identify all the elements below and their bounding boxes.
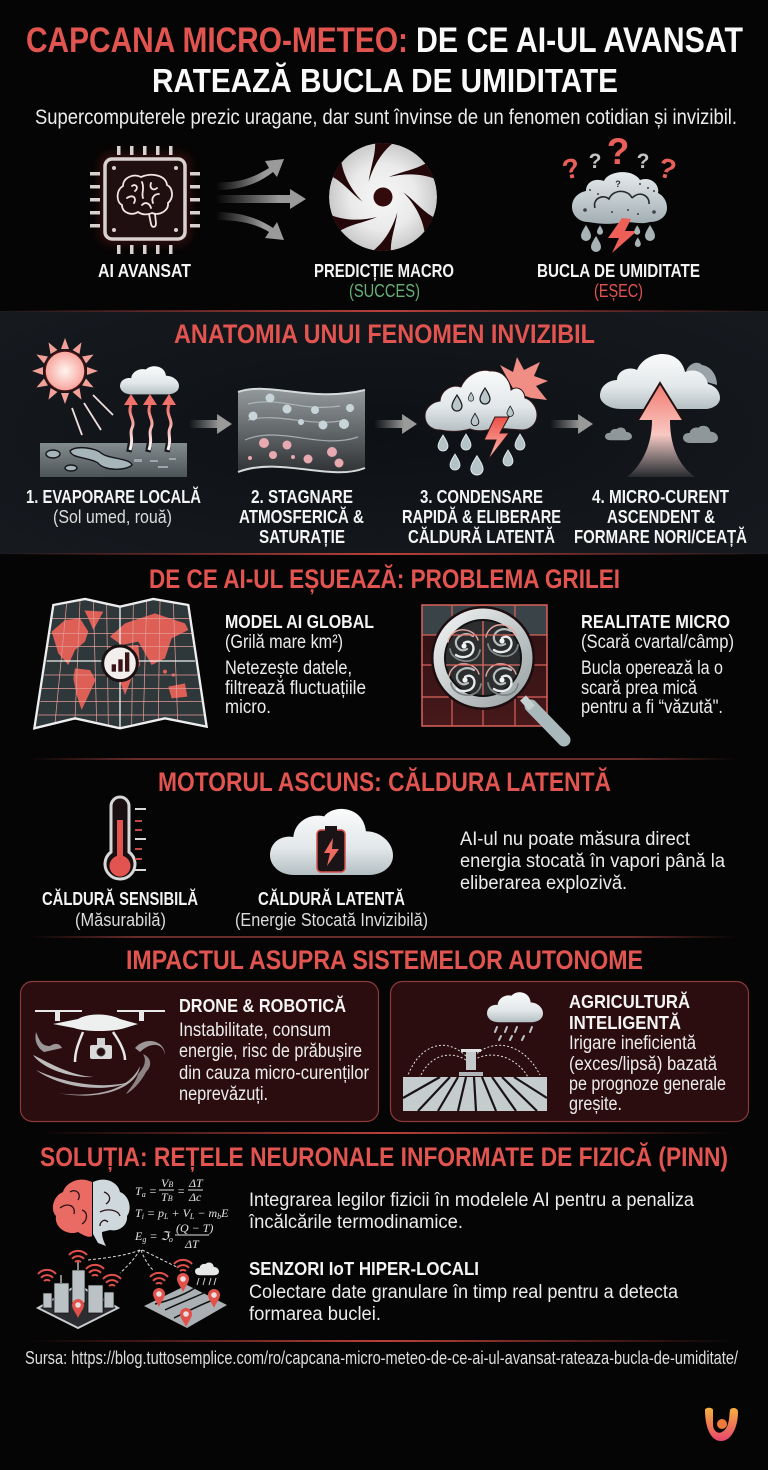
text: physics integration [248,1190,694,1233]
arrows: AI to macro [216,159,306,240]
icon: storm cloud with question marks: ? [607,131,629,172]
labels: top row: (SUCCES) [349,281,420,301]
labels: heat types [42,888,428,930]
labels: anatomy steps: RAPIDĂ & ELIBERARE [402,506,561,527]
text: micro reality: REALITATE MICRO [581,612,730,632]
text: agriculture [569,991,726,1115]
icon: stagnant saturated air [238,389,365,472]
labels: anatomy steps: ATMOSFERICĂ & [239,506,364,527]
labels: heat types: (Măsurabilă) [75,910,166,930]
icon: world map with grid [34,599,207,728]
text: physics integration: Integrarea legilor fizicii în modelele AI pentru a penaliza [249,1190,694,1211]
labels: anatomy steps: 3. CONDENSARE [420,487,543,507]
icon: storm cloud with question marks: ? [637,150,649,173]
icon: cloud with battery [270,809,393,875]
labels: top row [98,261,700,301]
icon: AI chip with brain [90,146,200,254]
text: latent heat explanation [460,829,725,894]
labels: anatomy steps: 4. MICRO-CURENT [592,487,729,507]
heading: grid problem: DE CE AI-UL EȘUEAZĂ: PROBLEMA GRILEI [149,563,620,594]
icon: half brain with equations: VB [161,1176,173,1190]
text: physics integration: încălcările termodinamice. [248,1212,463,1233]
text: micro reality [581,612,734,718]
heading: anatomy: ANATOMIA UNUI FENOMEN INVIZIBIL [174,319,595,349]
labels: anatomy steps: (Sol umed, rouă) [53,507,172,527]
text: micro reality: Bucla operează la o [581,658,723,679]
icon: half brain with equations: = ℑ [146,1229,171,1243]
icon: half brain with equations: a [142,1190,146,1199]
title: RATEAZĂ BUCLA DE UMIDITATE [152,62,618,99]
text: micro reality: pentru a fi “văzută". [581,697,723,718]
arrow: step 3 to 4 [550,414,593,434]
icon: half brain with equations: Δc [188,1190,202,1204]
text: latent heat explanation: eliberarea explozivă. [460,873,627,894]
labels: heat types: CĂLDURĂ LATENTĂ [258,888,405,909]
title [26,21,743,99]
title: CAPCANA MICRO-METEO: [26,21,408,60]
icon: half brain with equations: L [163,1212,169,1221]
icon: sun, evaporation and ground [32,338,187,477]
text: drones: energie, risc de prăbușire [179,1041,362,1062]
labels: anatomy steps: CĂLDURĂ LATENTĂ [408,526,555,547]
text: drones: DRONE & ROBOTICĂ [179,995,346,1016]
arrow: step 1 to 2 [189,414,232,434]
icon: half brain with equations: ΔT [188,1176,204,1190]
panel: agriculture [390,982,748,1122]
logo [705,1408,738,1441]
text: drones: neprevăzuți. [179,1084,268,1105]
arrow: step 2 to 3 [374,414,417,434]
text: agriculture: (exces/lipsă) bazată [569,1054,717,1075]
icon: half brain with equations: = [177,1184,185,1198]
text: global AI model: MODEL AI GLOBAL [225,612,374,632]
icon: half brain with equations: − m [194,1206,217,1220]
text: IoT sensors: Colectare date granulare în timp real pentru a detecta [249,1282,678,1303]
text: global AI model: filtrează fluctuațiile [225,678,366,699]
icon: half brain with equations: E [135,1229,142,1243]
labels: top row: PREDICȚIE MACRO [314,261,454,281]
icon: IoT sensors city and field [38,1250,227,1328]
labels: heat types: CĂLDURĂ SENSIBILĂ [42,888,198,909]
labels: anatomy steps: 1. EVAPORARE LOCALĂ [26,486,201,507]
icon: half brain with equations [53,1176,229,1251]
text: latent heat explanation: energia stocată în vapori până la [460,851,725,872]
icon: drone in turbulence [33,1011,165,1096]
icon: hurricane [329,143,437,251]
icon: storm cloud with question marks: ? [589,150,601,173]
text: agriculture: greșite. [569,1094,622,1115]
icon: condensation cloud with lightning [425,357,548,475]
icon: irrigation sprinkler under cloud [403,992,547,1111]
text: IoT sensors: formarea buclei. [249,1304,381,1325]
text: drones: din cauza micro-curenților [179,1063,370,1084]
heading: latent heat: MOTORUL ASCUNS: CĂLDURA LATENTĂ [158,766,611,797]
icon: half brain with equations: L [189,1212,195,1221]
text: micro reality: scară prea mică [581,678,697,699]
labels: anatomy steps: 2. STAGNARE [251,487,353,507]
icon: storm cloud with question marks: ? [559,152,583,186]
icon: half brain with equations: = p [144,1206,164,1220]
text: global AI model: micro. [225,697,271,718]
text: global AI model [225,612,374,718]
text: agriculture: AGRICULTURĂ [569,991,690,1012]
labels: anatomy steps: SATURAȚIE [259,527,345,547]
text: agriculture: INTELIGENTĂ [569,1012,681,1033]
labels: anatomy steps: ASCENDENT & [607,507,715,527]
labels: heat types: (Energie Stocată Invizibilă) [235,910,428,930]
text: latent heat explanation: AI-ul nu poate măsura direct [460,829,691,850]
icon: half brain with equations: i [142,1212,144,1221]
text: global AI model: Netezește datele, [225,658,352,679]
icon: half brain with equations: b [217,1212,221,1221]
text: drones [179,995,370,1105]
text: IoT sensors [249,1259,678,1325]
labels: top row: BUCLA DE UMIDITATE [537,261,700,281]
text: global AI model: (Grilă mare km²) [225,632,343,653]
text: IoT sensors: SENZORI IoT HIPER-LOCALI [249,1259,479,1279]
icon: magnifier over micro grid [422,605,564,740]
icon: half brain with equations: g [142,1235,146,1244]
labels: anatomy steps [26,486,747,547]
text: drones: Instabilitate, consum [179,1020,331,1041]
icon: half brain with equations: = [146,1184,157,1198]
icon: half brain with equations: T [135,1206,142,1220]
heading: impact: IMPACTUL ASUPRA SISTEMELOR AUTONOME [126,945,643,975]
icon: half brain with equations: TB [161,1190,173,1204]
icon: storm cloud with question marks: ? [655,152,679,186]
icon: half brain with equations: ΔT [184,1237,200,1251]
icon: half brain with equations: T [135,1184,142,1198]
icon: half brain with equations: E [220,1206,229,1220]
text: agriculture: Irigare ineficientă [569,1033,696,1054]
icon: micro-current and clouds [600,354,720,477]
text: micro reality: (Scară cvartal/câmp) [581,632,734,653]
icon: half brain with equations: (Q − T) [176,1221,213,1235]
icon: half brain with equations: o [169,1235,173,1244]
panel: drones [20,982,378,1122]
icon: half brain with equations: + V [168,1206,192,1220]
text: agriculture: pe prognoze generale [569,1074,726,1095]
icon: storm cloud with question marks [559,131,679,253]
labels: top row: (EȘEC) [594,281,643,301]
panel: anatomy band [0,310,768,555]
icon: thermometer [105,797,146,879]
labels: top row: AI AVANSAT [98,261,191,281]
icon: storm cloud with question marks: ? [615,179,621,189]
